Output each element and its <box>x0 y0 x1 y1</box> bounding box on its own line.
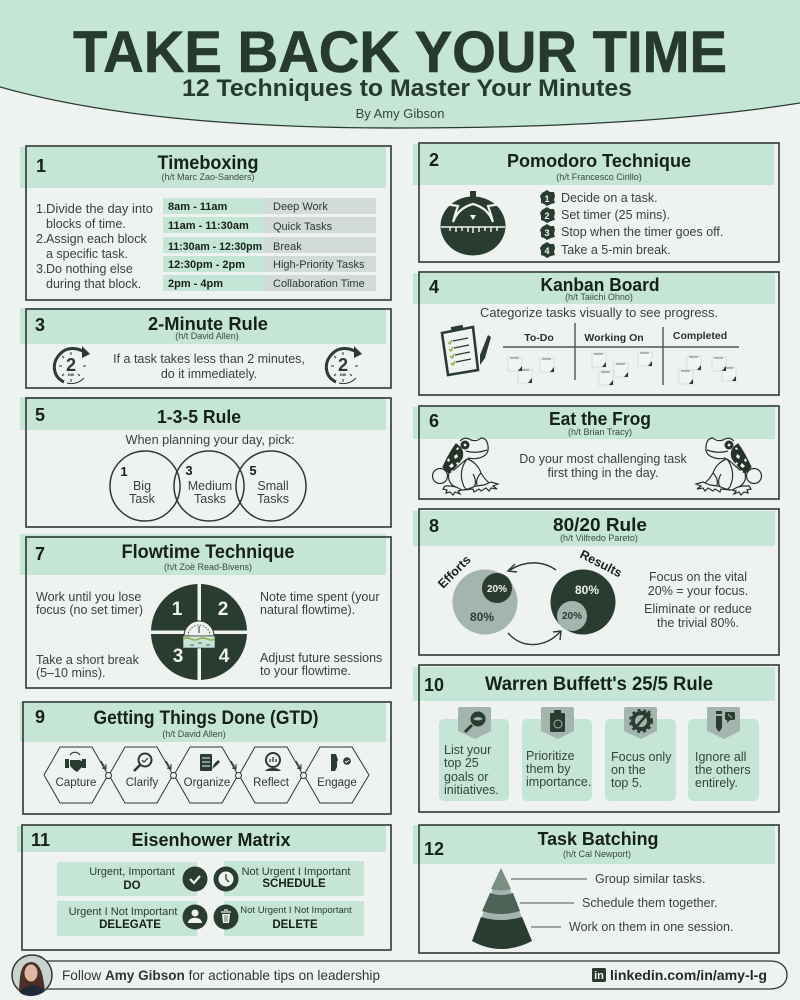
icon: 2 minute timer right: 2 <box>338 355 348 375</box>
panel: 3 2-Minute Rule: 2-Minute Rule <box>148 314 268 334</box>
card: list goals <box>439 707 509 801</box>
card: focus: Focus only <box>611 750 672 764</box>
icon: 2 minute timer left <box>54 346 90 384</box>
step text: Take a short break <box>36 653 140 667</box>
panel: 12 Task Batching: (h/t Cal Newport) <box>563 849 631 859</box>
schedule table: 8am - 11am <box>168 201 228 213</box>
title: TAKE BACK YOUR TIME <box>73 20 727 85</box>
quadrant wheel <box>151 584 247 680</box>
intro text: Categorize tasks visually to see progress. <box>480 306 718 320</box>
schedule table: 11:30am - 12:30pm <box>168 241 262 253</box>
icon: 2 minute timer right: MIN <box>340 373 347 377</box>
card: list goals: initiatives. <box>444 783 499 797</box>
card: list goals: List your <box>444 743 491 757</box>
kanban grid <box>503 323 739 385</box>
step text <box>36 590 382 680</box>
circle labels: Medium <box>188 479 232 493</box>
subtitle: 12 Techniques to Master Your Minutes <box>182 75 632 102</box>
pyramid <box>472 868 532 949</box>
panel: 3 2-Minute Rule: (h/t David Allen) <box>175 331 239 341</box>
icon: check <box>182 866 208 892</box>
panel: 9 Getting Things Done: (h/t David Allen) <box>162 729 226 739</box>
venn circles <box>110 451 306 521</box>
hexagon labels: Organize <box>184 777 230 789</box>
panel: 2 Pomodoro Technique: (h/t Francesco Cirillo) <box>556 172 642 182</box>
header banner <box>0 0 800 128</box>
panel: 11 Eisenhower Matrix <box>17 825 391 950</box>
steps list: a specific task. <box>46 247 128 261</box>
chart: efforts circle: 20% <box>487 584 507 595</box>
hexagon labels <box>56 777 357 789</box>
panel: 9 Getting Things Done <box>20 702 391 814</box>
body text <box>644 570 752 630</box>
body text: If a task takes less than 2 minutes, <box>113 352 305 366</box>
quadrant wheel: 3 <box>173 646 183 667</box>
chart: efforts circle <box>435 553 518 634</box>
icon: clipboard and pen <box>442 325 491 375</box>
icon: linkedin: in <box>594 970 604 982</box>
schedule table: 11am - 11:30am <box>168 220 249 232</box>
panel: 4 Kanban Board: 4 <box>429 277 439 297</box>
body text <box>519 452 687 480</box>
schedule table: High-Priority Tasks <box>273 259 365 271</box>
steps list: 3 <box>544 228 550 238</box>
chart: results circle <box>550 547 624 634</box>
icon: 2 minute timer right <box>326 346 362 384</box>
intro text: When planning your day, pick: <box>126 433 294 447</box>
circle labels: Task <box>129 492 156 506</box>
step text: to your flowtime. <box>260 664 351 678</box>
step text: focus (no set timer) <box>36 603 143 617</box>
panel: 11 Eisenhower Matrix: Eisenhower Matrix <box>132 830 290 850</box>
schedule table: 2pm - 4pm <box>168 278 223 290</box>
body text: first thing in the day. <box>548 466 658 480</box>
panel: 3 2-Minute Rule <box>20 308 391 388</box>
steps list: blocks of time. <box>46 217 126 231</box>
panel: 7 Flowtime Technique <box>20 534 391 688</box>
hexagon labels: Capture <box>56 777 96 789</box>
steps list <box>540 190 723 258</box>
panel: 7 Flowtime Technique: (h/t Zoë Read-Bivens) <box>164 562 252 572</box>
panel: 2 Pomodoro Technique: Pomodoro Technique <box>507 151 691 171</box>
quadrant backgrounds <box>57 861 364 936</box>
author photo <box>12 955 52 996</box>
arrow: efforts to results <box>508 631 561 645</box>
panel: 6 Eat the Frog: 6 <box>429 411 439 431</box>
panel: 7 Flowtime Technique: Flowtime Technique <box>122 542 294 563</box>
circle labels: Tasks <box>257 492 289 506</box>
steps list: 4 <box>544 246 550 256</box>
panel: 5 1-3-5 Rule <box>20 397 391 527</box>
quadrant wheel: 2 <box>218 599 228 620</box>
icon: linkedin <box>592 968 606 982</box>
card: prioritize: Prioritize <box>526 749 575 763</box>
steps list: Divide the day into <box>46 202 153 216</box>
chart: efforts circle: Efforts <box>435 553 474 591</box>
body text <box>113 352 305 381</box>
panel: 1 Timeboxing: 1 <box>36 156 46 176</box>
card: list goals: goals or <box>444 770 488 784</box>
body text: Focus on the vital <box>649 570 747 584</box>
quadrant labels <box>69 866 352 931</box>
quadrant labels: DELEGATE <box>99 919 161 931</box>
icon: frog left <box>432 438 498 495</box>
card: focus: top 5. <box>611 776 642 790</box>
step text: Note time spent (your <box>260 590 380 604</box>
icons: GTD steps <box>65 752 351 772</box>
circle labels: 1 <box>120 464 128 479</box>
steps list: Do nothing else <box>46 262 133 276</box>
chart: efforts circle: 80% <box>470 610 494 624</box>
panel: 8 80/20 Rule: 8 <box>429 516 439 536</box>
card: ignore: the others <box>695 763 751 777</box>
hexagon labels: Engage <box>317 777 357 789</box>
chart: results circle: 80% <box>575 583 599 597</box>
panel: 10 Warren Buffett's 25/5 Rule: 10 <box>424 675 444 695</box>
icon: 2 minute timer left: MIN <box>68 373 75 377</box>
card: focus: on the <box>611 763 646 777</box>
card: ignore: entirely. <box>695 776 738 790</box>
steps list: 3. <box>36 262 46 276</box>
panel: 1 Timeboxing: Timeboxing <box>158 153 258 174</box>
steps list: Assign each block <box>46 232 148 246</box>
schedule table: 12:30pm - 2pm <box>168 259 245 271</box>
panel: 9 Getting Things Done: 9 <box>35 707 45 727</box>
kanban grid: Working On <box>584 332 644 344</box>
step text: (5–10 mins). <box>36 666 105 680</box>
batching steps: Schedule them together. <box>582 896 718 910</box>
step text: Adjust future sessions <box>260 651 382 665</box>
kanban grid: To-Do <box>524 332 554 344</box>
panel: 2 Pomodoro Technique: 2 <box>429 150 439 170</box>
circle labels: Tasks <box>194 492 226 506</box>
chart: results circle: 20% <box>562 611 582 622</box>
body text: Do your most challenging task <box>519 452 687 466</box>
card: prioritize: them by <box>526 762 571 776</box>
card: list goals: top 25 <box>444 756 479 770</box>
panel: 6 Eat the Frog: Eat the Frog <box>549 409 651 429</box>
steps list: 1 <box>544 194 550 204</box>
quadrant labels: DO <box>123 880 141 892</box>
panel: 7 Flowtime Technique: 7 <box>35 544 45 564</box>
steps list: during that block. <box>46 277 141 291</box>
panel: 6 Eat the Frog <box>413 406 779 499</box>
steps list: 2 <box>544 211 550 221</box>
panel: 5 1-3-5 Rule: 5 <box>35 405 45 425</box>
step text: natural flowtime). <box>260 603 355 617</box>
body text: the trivial 80%. <box>657 616 739 630</box>
quadrant labels: Not Urgent I Not Important <box>240 905 352 916</box>
linkedin url: linkedin.com/in/amy-l-g <box>610 967 767 983</box>
steps list: Stop when the timer goes off. <box>561 225 723 239</box>
panel: 6 Eat the Frog: (h/t Brian Tracy) <box>568 427 632 437</box>
icon: trash <box>214 904 238 930</box>
quadrant wheel: 1 <box>172 599 183 620</box>
panel: 10 Warren Buffett's 25/5 Rule <box>413 665 779 812</box>
panel: 12 Task Batching <box>413 825 779 953</box>
panel: 4 Kanban Board <box>413 272 779 395</box>
quadrant wheel: 4 <box>219 646 230 667</box>
panel: 8 80/20 Rule: 80/20 Rule <box>553 515 647 535</box>
panel: 4 Kanban Board: Kanban Board <box>540 275 660 295</box>
icon: 2 minute timer left: 2 <box>66 355 76 375</box>
icon: clock <box>214 866 238 892</box>
quadrant labels: SCHEDULE <box>262 878 326 890</box>
chart: results circle: Results <box>578 547 624 580</box>
steps list: Decide on a task. <box>561 191 658 205</box>
card: prioritize: importance. <box>526 775 591 789</box>
panel: 8 80/20 Rule: (h/t Vilfredo Pareto) <box>560 533 638 543</box>
byline: By Amy Gibson <box>356 106 444 121</box>
panel: 1 Timeboxing: (h/t Marc Zao-Sanders) <box>161 172 255 182</box>
icon: stopwatch and waves <box>183 621 215 648</box>
arrow: results to efforts <box>508 563 556 572</box>
batching steps: Work on them in one session. <box>569 920 733 934</box>
panel: 12 Task Batching: 12 <box>424 839 444 859</box>
panel: 9 Getting Things Done: Getting Things Done (GTD) <box>94 708 318 729</box>
footer bar <box>45 961 787 989</box>
batching steps <box>569 872 733 934</box>
body text: Eliminate or reduce <box>644 602 752 616</box>
circle labels: 3 <box>185 463 193 478</box>
panel: 8 80/20 Rule <box>413 509 779 655</box>
body text: do it immediately. <box>161 367 257 381</box>
panel: 2 Pomodoro Technique <box>413 143 779 262</box>
panel: 11 Eisenhower Matrix: 11 <box>31 830 50 850</box>
card: ignore: Ignore all <box>695 750 746 764</box>
circle labels: Small <box>257 479 289 493</box>
panel: 1 Timeboxing <box>20 146 391 300</box>
circle labels: 5 <box>249 463 257 478</box>
schedule table: Collaboration Time <box>273 278 365 290</box>
icon: frog right <box>696 438 762 495</box>
quadrant labels: Not Urgent I Important <box>242 866 350 878</box>
steps list: Set timer (25 mins). <box>561 208 670 222</box>
card: ignore <box>688 707 759 801</box>
schedule table <box>163 198 376 291</box>
schedule table: Break <box>273 241 302 253</box>
step text: Work until you lose <box>36 590 141 604</box>
hexagon process <box>44 747 369 803</box>
icon: tomato timer <box>440 191 506 256</box>
panel: 12 Task Batching: Task Batching <box>538 829 658 849</box>
card: focus <box>605 707 676 801</box>
footer text: Follow Amy Gibson for actionable tips on leadership <box>62 967 380 983</box>
steps list: 1. <box>36 202 46 216</box>
panel: 4 Kanban Board: (h/t Taiichi Ohno) <box>565 292 633 302</box>
quadrant labels: Urgent I Not Important <box>69 906 177 918</box>
body text: 20% = your focus. <box>648 584 748 598</box>
quadrant labels: Urgent, Important <box>89 866 175 878</box>
panel: 10 Warren Buffett's 25/5 Rule: Warren Buffett's 25/5 Rule <box>485 674 713 695</box>
steps list: 2. <box>36 232 46 246</box>
quadrant labels: DELETE <box>272 919 318 931</box>
circle labels: Big <box>133 479 151 493</box>
icon: person <box>182 904 208 930</box>
batching steps: Group similar tasks. <box>595 872 705 886</box>
circle labels <box>120 463 289 506</box>
card: prioritize <box>522 707 592 801</box>
panel: 5 1-3-5 Rule: 1-3-5 Rule <box>157 407 241 427</box>
kanban grid: Completed <box>673 330 727 342</box>
hexagon labels: Reflect <box>253 777 290 789</box>
steps list: Take a 5-min break. <box>561 243 671 257</box>
sticky notes <box>508 352 736 385</box>
steps list <box>36 202 153 291</box>
panel: 3 2-Minute Rule: 3 <box>35 315 45 335</box>
schedule table: Deep Work <box>273 201 328 213</box>
schedule table: Quick Tasks <box>273 221 333 233</box>
connector lines <box>511 879 587 927</box>
hexagon labels: Clarify <box>126 777 159 789</box>
